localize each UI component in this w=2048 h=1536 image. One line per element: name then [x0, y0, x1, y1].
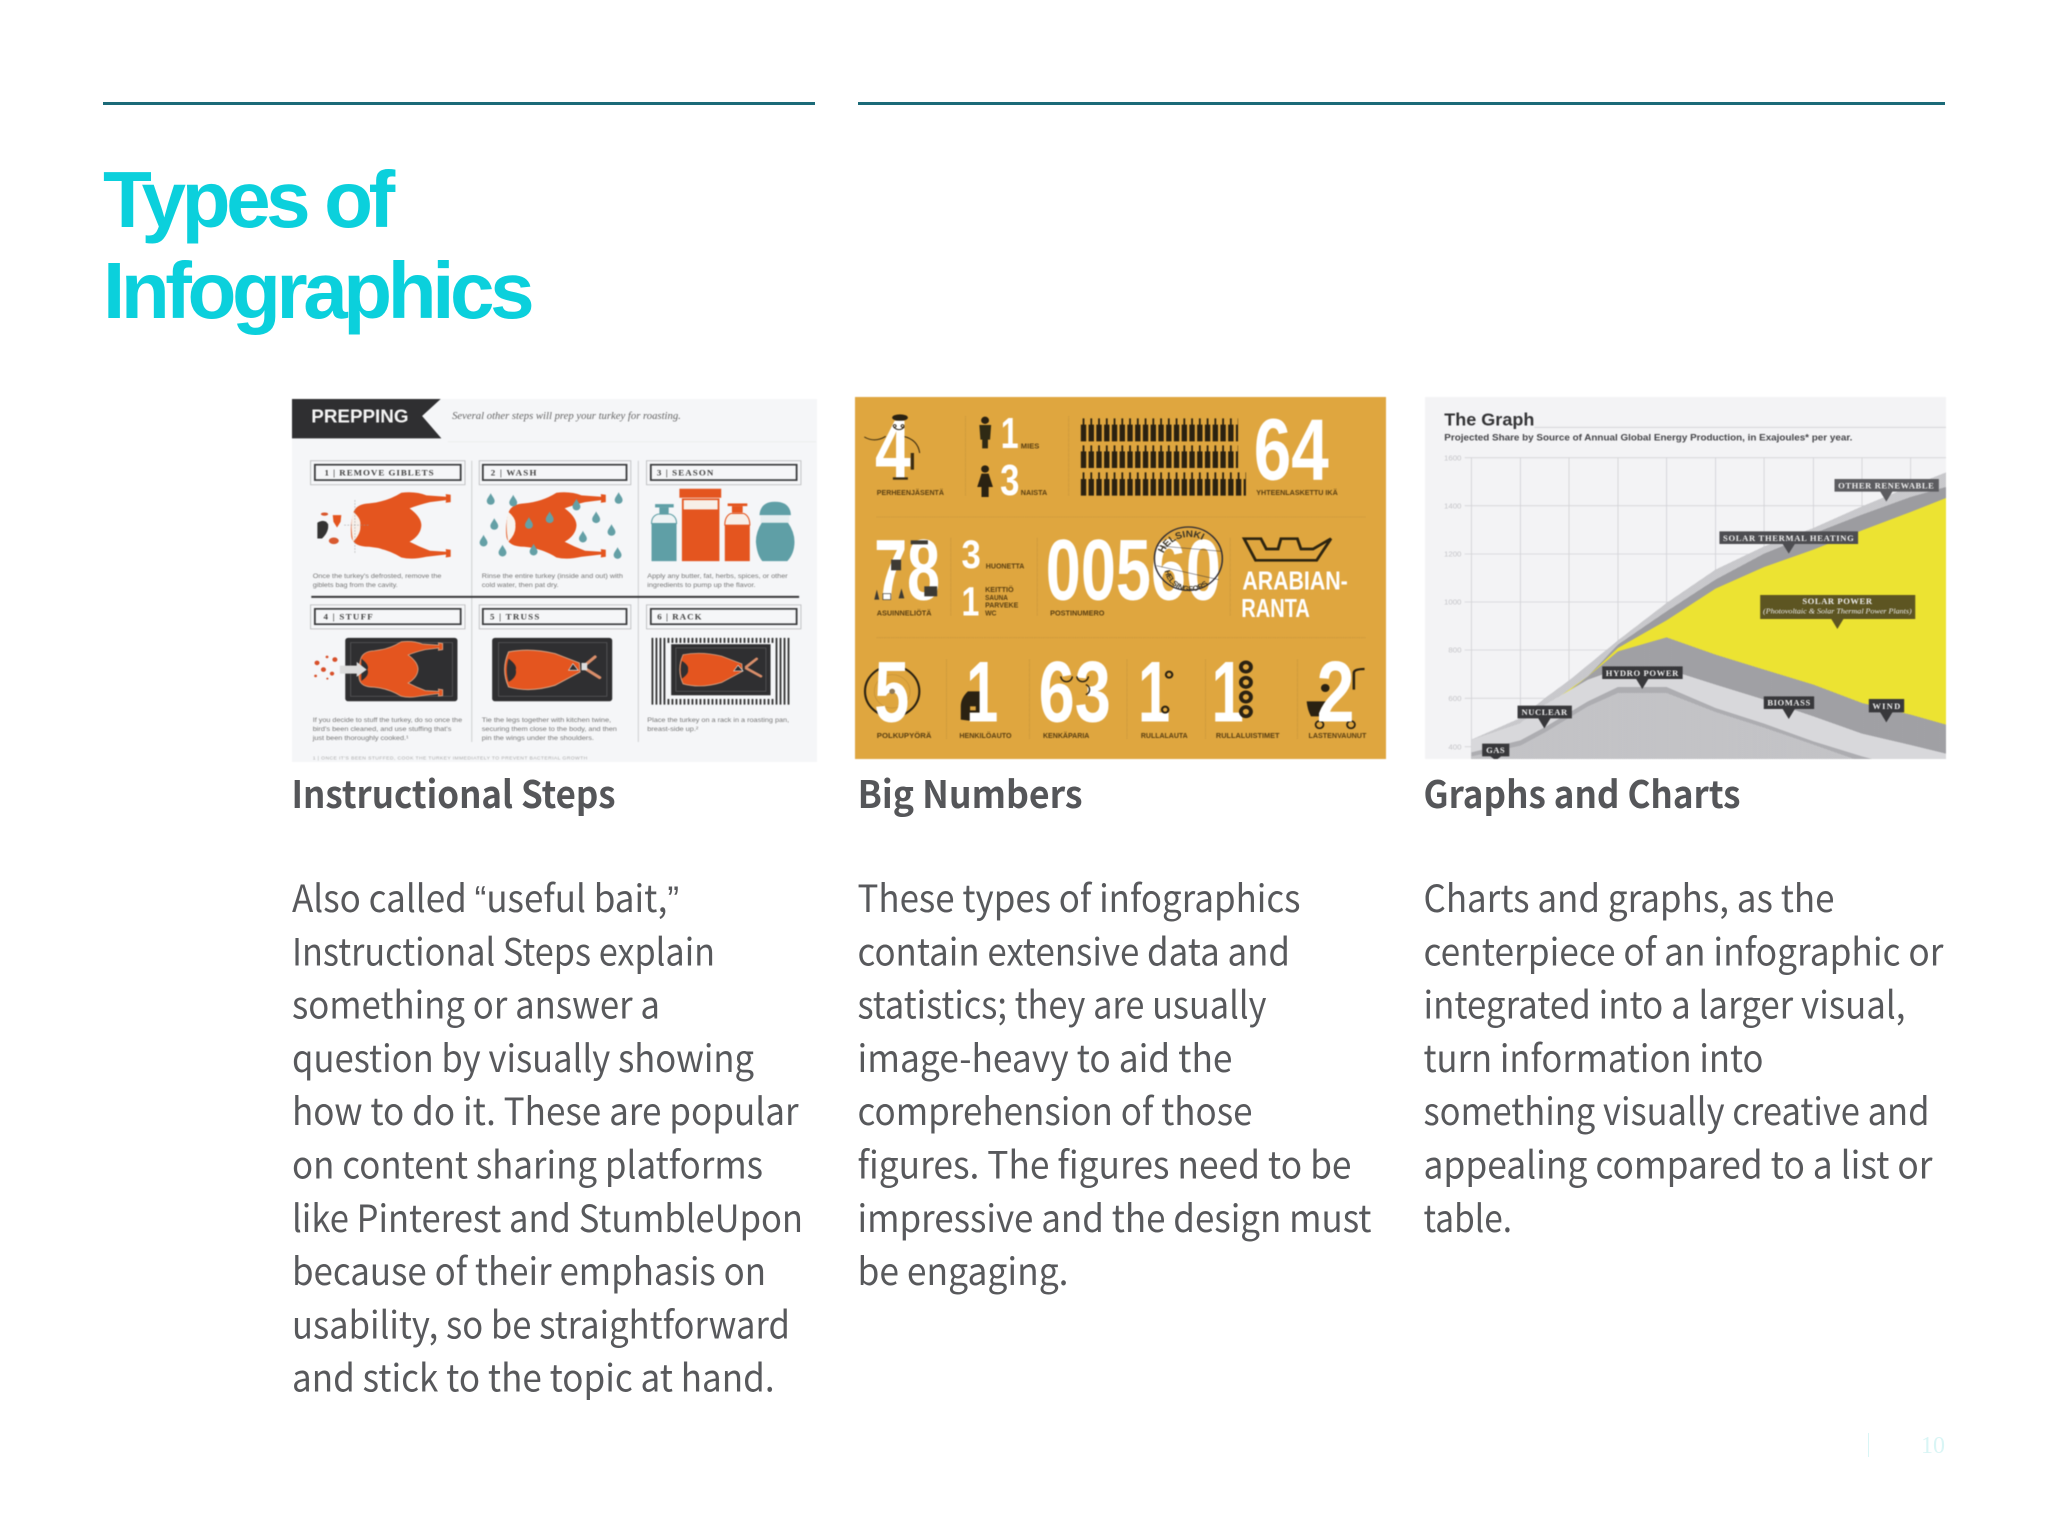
step captions: Once the turkey's defrosted, remove the [313, 573, 442, 580]
step 4 illustration: stuffing the turkey [314, 638, 457, 701]
chart grid and axis: 1600 [1444, 454, 1461, 462]
step 6 illustration: turkey on a rack [652, 643, 792, 699]
text: big numbers description: impressive and the design must [858, 1188, 1372, 1243]
heading: big numbers: Big Numbers [858, 764, 1083, 819]
step captions: just been thoroughly cooked.¹ [312, 735, 409, 742]
step 3 illustration: spice jars [652, 489, 794, 561]
text: big numbers description [858, 868, 1372, 1296]
step 1 illustration: turkey and giblets [317, 492, 451, 559]
callout labels [1482, 479, 1939, 760]
dividers [472, 461, 638, 742]
row 2: apartment figures: ARABIAN- [1242, 567, 1348, 595]
small labels: WC [985, 609, 997, 618]
text: instructional steps description: because of their emphasis on [292, 1241, 766, 1296]
small labels: HENKILÖAUTO [959, 731, 1012, 740]
step banners [311, 461, 801, 629]
text: graphs and charts description: something visually creative and [1424, 1081, 1930, 1136]
chart grid and axis: 1200 [1444, 550, 1461, 559]
callout: gas: GAS [1486, 746, 1505, 755]
text: instructional steps description: Also called “useful bait,” [292, 868, 679, 923]
step captions: bird's been cleaned, and use stuffing that's [313, 726, 452, 733]
chart grid and axis: 1000 [1444, 598, 1461, 607]
heading: graphs and charts: Graphs and Charts [1424, 764, 1740, 819]
title: Types of [103, 155, 391, 244]
callout: solar thermal heating [1719, 531, 1858, 554]
step captions: cold water, then pat dry. [482, 582, 559, 589]
text: instructional steps description: on content sharing platforms [292, 1134, 763, 1190]
step 5 illustration: trussed turkey [492, 638, 612, 701]
stamp: helsinki postmark [1153, 526, 1224, 592]
text: graphs and charts description: centerpiece of an infographic or [1424, 921, 1944, 976]
step captions: pin the wings under the shoulders. [482, 735, 594, 742]
row 3: numbers: 2 [1317, 643, 1355, 740]
text: big numbers description: contain extensive data and [858, 921, 1290, 976]
text: instructional steps description: question by visually showing [292, 1028, 754, 1083]
step captions: 1 | ONCE IT'S BEEN STUFFED, COOK THE TURKEY IMMEDIATELY TO PREVENT BACTERIAL GROWTH [313, 755, 588, 761]
row 2: apartment figures: 00560 [1046, 522, 1221, 618]
step titles: 1 | REMOVE GIBLETS [325, 468, 434, 477]
chart title: Projected Share by Source of Annual Global Energy Production, in Exajoules* per year. [1444, 433, 1852, 442]
row 1: family figures: 4 [875, 404, 911, 496]
text: graphs and charts description [1424, 868, 1944, 1243]
small labels: SAUNA [985, 593, 1008, 602]
text: graphs and charts description: turn information into [1424, 1028, 1764, 1083]
step captions: breast-side up.² [647, 726, 699, 733]
callout: biomass: BIOMASS [1767, 699, 1811, 708]
text: big numbers description: These types of infographics [858, 868, 1300, 923]
callout: other renewable [1835, 479, 1939, 502]
callout: hydro power [1602, 666, 1683, 689]
text: instructional steps description: and stick to the topic at hand. [292, 1348, 775, 1403]
row 2: apartment figures: 1 [961, 579, 979, 624]
banner: prepping [292, 399, 816, 442]
title: Infographics [103, 246, 530, 335]
step titles: 6 | RACK [657, 612, 702, 621]
chart grid and axis: 800 [1448, 646, 1461, 655]
chart grid and axis: 1400 [1444, 502, 1461, 510]
text: big numbers description: be engaging. [858, 1241, 1068, 1296]
callout: gas [1482, 744, 1509, 760]
callout: wind: WIND [1872, 702, 1900, 711]
row 3: numbers: 63 [1039, 643, 1111, 740]
step captions: securing them close to the body, and then [482, 726, 617, 733]
text: graphs and charts description: Charts and graphs, as the [1424, 868, 1834, 923]
rule: right header line [858, 102, 1945, 104]
small labels: RULLALAUTA [1141, 731, 1188, 740]
panel image: big numbers amber infographic [854, 396, 1387, 760]
small labels: PERHEENJÄSENTÄ [877, 488, 944, 497]
step 2 illustration: turkey and water drops [480, 492, 623, 559]
step captions: If you decide to stuff the turkey, do so once the [313, 717, 462, 724]
row 2: apartment figures: 3 [961, 531, 981, 577]
row 1: family figures: 3 [1000, 455, 1019, 505]
small labels: KEITTIÖ [985, 585, 1014, 594]
step titles: 3 | SEASON [657, 468, 714, 477]
row 2: apartment figures: 78 [874, 522, 940, 618]
chart grid and axis: 600 [1448, 694, 1461, 703]
text: big numbers description: figures. The figures need to be [858, 1134, 1352, 1190]
candles and total age: 64 [1254, 402, 1329, 499]
callout: nuclear: NUCLEAR [1521, 708, 1568, 717]
small labels: POLKUPYÖRÄ [877, 731, 932, 740]
stamp: helsinki postmark: HELSINKI [1157, 530, 1206, 554]
small labels: LASTENVAUNUT [1308, 731, 1366, 740]
icon: crown [1244, 539, 1331, 560]
step titles: 4 | STUFF [323, 612, 373, 621]
text: instructional steps description: something or answer a [292, 975, 660, 1030]
small labels [877, 442, 1366, 740]
row 1: family figures: 1 [1001, 408, 1019, 458]
heading: instructional steps: Instructional Steps [292, 764, 616, 819]
small labels: MIES [1021, 442, 1039, 450]
stacked areas [1471, 472, 1946, 759]
step titles [323, 468, 714, 621]
chart grid and axis [1444, 454, 1946, 759]
text: instructional steps description: Instructional Steps explain [292, 921, 715, 976]
row 3: numbers: 1 [1138, 643, 1170, 740]
row 2: apartment figures: RANTA [1241, 594, 1310, 623]
panel image: the graph stacked area chart [1426, 398, 1947, 760]
step titles: 2 | WASH [491, 468, 537, 477]
callout: solar thermal heating: SOLAR THERMAL HEATING [1723, 534, 1854, 543]
text: graphs and charts description: table. [1424, 1188, 1512, 1243]
text: instructional steps description [292, 868, 803, 1403]
step captions: ingredients to pump up the flavor. [647, 582, 756, 589]
text: big numbers description: image-heavy to aid the [858, 1028, 1232, 1083]
dotted dividers [877, 416, 1366, 740]
small labels: RULLALUISTIMET [1216, 731, 1280, 740]
callout: wind [1869, 699, 1904, 722]
text: instructional steps description: like Pinterest and StumbleUpon [292, 1188, 803, 1243]
chart grid and axis: 400 [1448, 743, 1461, 751]
chart title [1444, 410, 1946, 442]
text: big numbers description: comprehension of those [858, 1081, 1252, 1136]
step captions [312, 573, 789, 761]
page number: 10 [1921, 1433, 1945, 1459]
callout: nuclear [1518, 706, 1572, 728]
small labels: HUONETTA [986, 562, 1025, 571]
callout: other renewable: OTHER RENEWABLE [1838, 482, 1934, 491]
small labels: NAISTA [1021, 488, 1047, 497]
row 1: family figures [864, 404, 1019, 505]
panel image: instructional steps turkey prep [291, 398, 816, 762]
stamp: helsinki postmark: HELSINGFORS [1164, 570, 1208, 592]
step captions: Apply any butter, fat, herbs, spices, or other [647, 573, 788, 580]
callout: hydro power: HYDRO POWER [1606, 669, 1679, 678]
small labels: KENKÄPARIA [1043, 731, 1090, 740]
small labels: YHTEENLASKETTU IKÄ [1256, 488, 1338, 497]
row 3: numbers: 1 [966, 643, 998, 740]
text: graphs and charts description: appealing compared to a list or [1424, 1134, 1933, 1190]
chart title: The Graph [1444, 410, 1534, 430]
text: big numbers description: statistics; they are usually [858, 975, 1267, 1030]
step captions: Rinse the entire turkey (inside and out) with [482, 573, 623, 580]
step captions: Place the turkey on a rack in a roasting pan, [647, 717, 789, 724]
title [103, 155, 532, 335]
callout: solar power: (Photovoltaic & Solar Thermal Power Plants) [1763, 607, 1912, 616]
banner: prepping: Several other steps will prep your turkey for roasting. [452, 410, 681, 422]
map details on 78 [874, 540, 937, 600]
text: instructional steps description: how to do it. These are popular [292, 1081, 799, 1136]
rule: left header line [103, 102, 815, 104]
step captions: Tie the legs together with kitchen twine, [482, 717, 611, 724]
step captions: giblets bag from the cavity. [313, 582, 398, 589]
small labels: POSTINUMERO [1050, 609, 1104, 618]
row 2: apartment figures [874, 522, 1348, 624]
text: graphs and charts description: integrated into a larger visual, [1424, 975, 1906, 1030]
row 3: numbers [865, 643, 1365, 740]
callout: solar power [1760, 595, 1915, 629]
callout: solar power: SOLAR POWER [1802, 597, 1873, 606]
small labels: ASUINNELIÖTÄ [877, 609, 932, 618]
row 3: numbers: 5 [874, 643, 909, 740]
small labels: PARVEKE [985, 601, 1018, 610]
text: instructional steps description: usability, so be straightforward [292, 1294, 790, 1349]
banner: prepping: PREPPING [311, 406, 409, 426]
row 3: numbers: 1 [1212, 643, 1244, 740]
callout: biomass [1764, 696, 1814, 719]
step titles: 5 | TRUSS [490, 612, 540, 621]
